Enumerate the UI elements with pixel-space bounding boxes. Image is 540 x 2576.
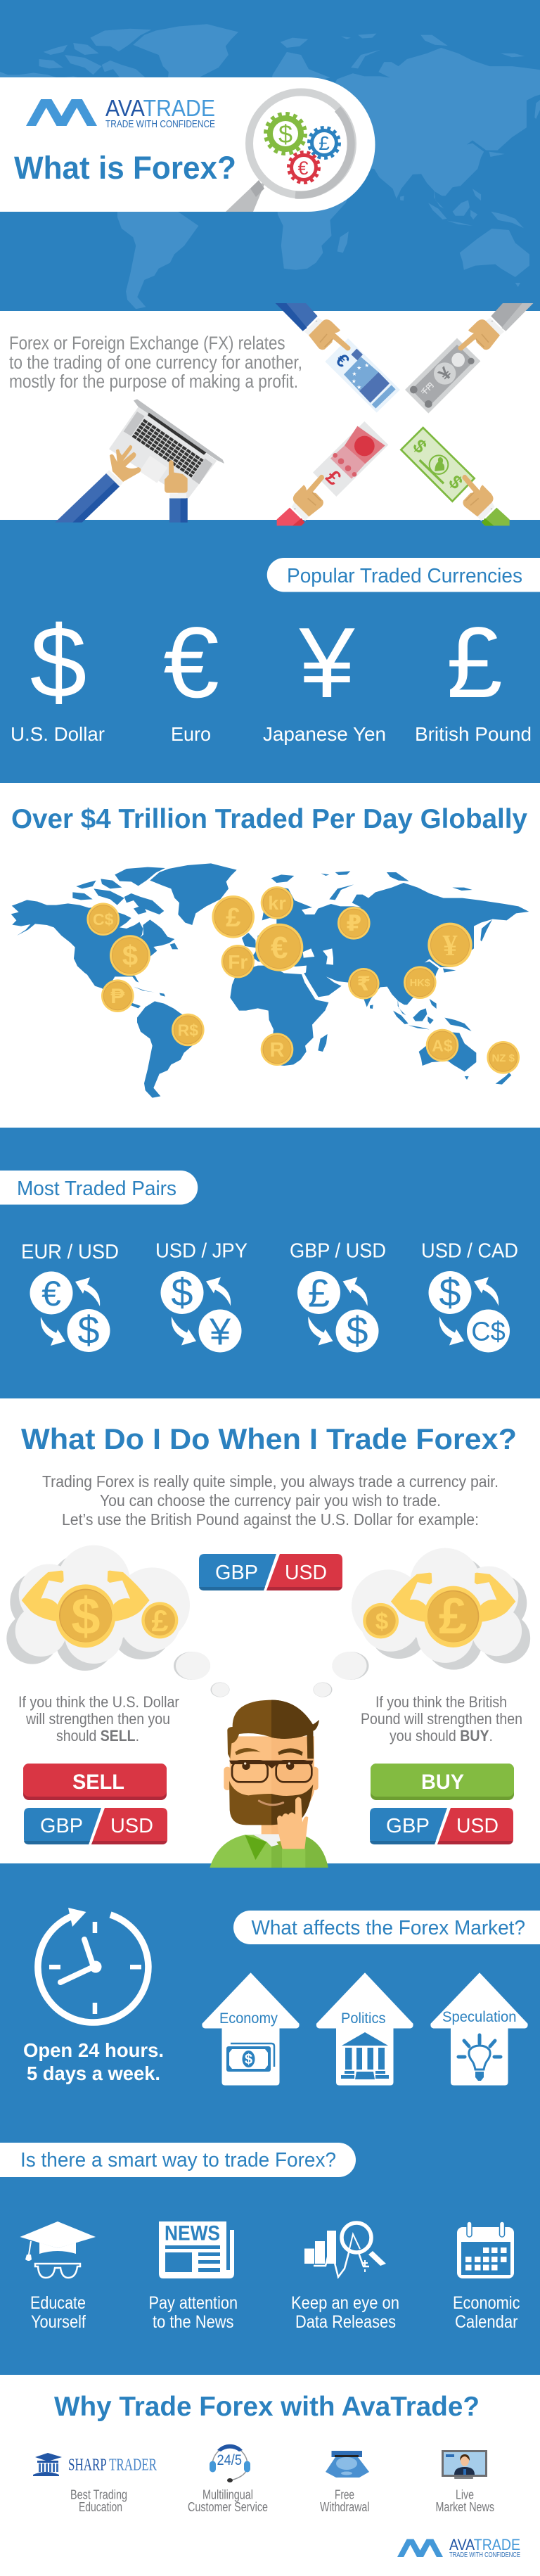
- thought cloud: dollar strengthens: [6, 1545, 190, 1671]
- coin: franc: Fr: [228, 951, 248, 973]
- panel: blue currencies band: [0, 520, 540, 783]
- currency: Euro: €: [163, 607, 219, 719]
- currency: British Pound: £: [446, 607, 503, 719]
- pill heading: What affects the Forex Market?: [233, 1911, 540, 1944]
- button: GBP / USD top: [199, 1554, 342, 1590]
- tip: Pay attention to the News: [149, 2221, 238, 2332]
- currency: U.S. Dollar: U.S. Dollar: [11, 723, 105, 745]
- pill heading: Most Traded Pairs: [0, 1171, 198, 1204]
- coin: euro: €: [271, 931, 288, 965]
- coin: euro: [255, 924, 303, 971]
- illustration: yen bill with hand: ¥: [435, 364, 456, 385]
- text: open hours: [23, 2039, 164, 2084]
- benefit: Free Withdrawal: Withdrawal: [320, 2500, 370, 2514]
- coin: franc: [221, 945, 255, 978]
- currency: British Pound: British Pound: [415, 723, 532, 745]
- illustration: pound bill with hand: [277, 421, 388, 550]
- icon: government building: [341, 2032, 389, 2079]
- thought cloud: pound strengthens: £: [439, 1588, 467, 1645]
- icon: TV news anchor: [442, 2450, 487, 2479]
- pair: GBP / USD: [290, 1239, 386, 1353]
- currency: U.S. Dollar: $: [30, 605, 86, 719]
- tip: Economic Calendar: [453, 2221, 520, 2332]
- logo: AvaTrade header: AVATRADE: [105, 95, 215, 121]
- coin: New Zealand dollar: NZ $: [491, 1052, 515, 1064]
- arrow: Politics: Politics: [341, 2010, 385, 2027]
- tip: Pay attention to the News: to the News: [153, 2312, 233, 2332]
- text: trading intro paragraph: Let’s use the British Pound against the U.S. Dollar for example:: [62, 1510, 479, 1529]
- pill heading: Is there a smart way to trade Forex?: [0, 2143, 356, 2177]
- button: GBP / USD left: [24, 1808, 167, 1844]
- button: GBP / USD right: USD: [456, 1815, 499, 1837]
- thought cloud: dollar strengthens: £: [152, 1605, 169, 1638]
- text: trading intro paragraph: [42, 1472, 499, 1529]
- tip: Economic Calendar: Economic: [453, 2293, 520, 2313]
- heading: What is Forex?: What is Forex?: [14, 150, 236, 186]
- logo: AvaTrade header: TRADE WITH CONFIDENCE: [105, 118, 215, 130]
- coin: real: R$: [178, 1021, 198, 1040]
- text: sell explanation: If you think the U.S. Dollar: [18, 1693, 179, 1711]
- pair: EUR / USD: [21, 1241, 119, 1352]
- arrow: Speculation: Speculation: [442, 2009, 516, 2025]
- thought cloud: pound strengthens: $: [375, 1608, 388, 1634]
- coin: Australian dollar: [426, 1029, 458, 1061]
- coin: Hong Kong dollar: [404, 966, 437, 999]
- illustration: dollar bill with hand: $: [444, 471, 467, 493]
- illustration: dollar bill with hand: $: [409, 435, 431, 457]
- panel: top blue header band: [0, 0, 540, 311]
- illustration: laptop with hands: [55, 399, 224, 523]
- icon: withdrawal slot: [326, 2451, 369, 2478]
- pill heading: What affects the Forex Market?: What affects the Forex Market?: [252, 1917, 525, 1939]
- illustration: euro bill with hand: ★: [356, 364, 361, 371]
- text: open hours: Open 24 hours.: [23, 2039, 164, 2061]
- thought cloud: dollar strengthens: $: [71, 1587, 101, 1645]
- coin: US dollar: [110, 935, 150, 976]
- coin: ruble: ₽: [347, 911, 361, 936]
- pair: USD / CAD: $: [439, 1270, 461, 1314]
- pair: USD / JPY: ¥: [209, 1311, 231, 1353]
- benefit: Best Trading Education: [33, 2453, 157, 2514]
- illustration: yen bill with hand: [405, 303, 533, 414]
- pair: GBP / USD: $: [346, 1308, 368, 1353]
- illustration: euro bill with hand: ★: [352, 378, 356, 385]
- text: sell explanation: [18, 1693, 179, 1745]
- arrow: Economy: Economy: [219, 2010, 278, 2027]
- text: sell explanation: should SELL.: [56, 1727, 139, 1745]
- pair: GBP / USD: GBP / USD: [290, 1239, 386, 1262]
- icon: Sharp Trader logo: [33, 2453, 157, 2476]
- icon: magnifier with gears: $: [278, 120, 292, 148]
- arrow: Speculation: [431, 1973, 527, 2085]
- button: SELL: [23, 1764, 167, 1800]
- tip: Economic Calendar: Calendar: [455, 2312, 518, 2332]
- tip: Educate Yourself: [20, 2221, 96, 2332]
- icon: newspaper: NEWS: [165, 2222, 220, 2245]
- pair: EUR / USD: EUR / USD: [21, 1241, 119, 1263]
- icon: magnifier with gears: [226, 92, 353, 212]
- illustration: euro bill with hand: ★: [352, 371, 357, 377]
- text: buy explanation: you should BUY.: [390, 1727, 493, 1745]
- benefit: Multilingual Customer Service: [188, 2444, 268, 2514]
- coin: krona: kr: [268, 893, 286, 914]
- coin: ruble: [338, 907, 371, 940]
- coin: peso: ₱: [110, 985, 125, 1008]
- button: GBP / USD right: GBP: [386, 1815, 430, 1837]
- pair: USD / JPY: USD / JPY: [155, 1239, 248, 1262]
- illustration: dollar bill with hand: [399, 426, 510, 526]
- coin: New Zealand dollar: [487, 1041, 520, 1074]
- pair: GBP / USD: £: [308, 1270, 330, 1315]
- pair: EUR / USD: €: [41, 1274, 61, 1313]
- button: BUY: BUY: [421, 1771, 464, 1794]
- pair: USD / CAD: USD / CAD: [421, 1239, 518, 1262]
- benefit: Live Market News: [436, 2450, 494, 2514]
- icon: newspaper: [159, 2221, 234, 2278]
- illustration: euro bill with hand: ★: [364, 362, 369, 369]
- tip: Educate Yourself: Yourself: [31, 2312, 86, 2332]
- thought bubbles: [174, 1652, 368, 1697]
- heading: Why Trade Forex with AvaTrade?: Why Trade Forex with AvaTrade?: [54, 2392, 480, 2422]
- icon: magnifier with gears: £: [319, 132, 330, 154]
- text: sell explanation: will strengthen then you: [25, 1710, 170, 1728]
- tip: Pay attention to the News: Pay attention: [149, 2293, 238, 2313]
- icon: calendar: [457, 2221, 514, 2278]
- tip: Keep an eye on Data Releases: Keep an eye on: [291, 2293, 399, 2313]
- benefit: Free Withdrawal: [320, 2451, 370, 2514]
- illustration: euro bill with hand: [276, 303, 400, 413]
- coin: yen: [428, 923, 472, 967]
- coin: rand: R: [270, 1039, 285, 1061]
- currency: Euro: Euro: [171, 723, 211, 745]
- icon: data chart and magnifier: [304, 2223, 386, 2277]
- currency: British Pound: [415, 607, 532, 745]
- pill heading: Most Traded Pairs: Most Traded Pairs: [17, 1178, 176, 1200]
- tip: Keep an eye on Data Releases: [291, 2223, 399, 2332]
- coin: yen: ¥: [443, 930, 457, 962]
- benefit: Multilingual Customer Service: Multilingual: [202, 2487, 253, 2501]
- benefit: Best Trading Education: Education: [79, 2500, 122, 2514]
- panel: blue traded pairs band: [0, 1128, 540, 1398]
- benefit: Live Market News: Market News: [436, 2500, 494, 2514]
- button: GBP / USD left: GBP: [40, 1815, 83, 1837]
- text: open hours: 5 days a week.: [27, 2062, 160, 2084]
- text: buy explanation: Pound will strengthen then: [361, 1710, 522, 1728]
- arrow: Economy: [202, 1973, 299, 2085]
- button: GBP / USD right: [370, 1808, 513, 1844]
- title pill with logo and magnifier: [0, 77, 375, 212]
- pair: USD / CAD: C$: [471, 1317, 506, 1346]
- coin: Australian dollar: A$: [432, 1037, 453, 1055]
- pair: USD / JPY: [155, 1239, 248, 1353]
- logo: AvaTrade footer: TRADE WITH CONFIDENCE: [449, 2551, 520, 2559]
- pill heading: Popular Traded Currencies: [267, 558, 540, 592]
- icon: magnifier with gears: €: [297, 158, 309, 179]
- pill heading: Popular Traded Currencies: Popular Traded Currencies: [287, 565, 522, 587]
- illustration: euro bill with hand: ★: [356, 384, 361, 390]
- coin: real: [172, 1014, 205, 1046]
- pair: USD / JPY: $: [171, 1270, 193, 1314]
- text: trading intro paragraph: Trading Forex is really quite simple, you always trade a currency pair.: [42, 1472, 499, 1491]
- text: forex definition: [9, 333, 302, 392]
- icon: money: [226, 2043, 274, 2072]
- benefit: Multilingual Customer Service: Customer Service: [188, 2500, 268, 2514]
- chart: world map with currency coins: [11, 863, 529, 1098]
- illustration: euro bill with hand: €: [331, 349, 354, 371]
- text: forex definition: mostly for the purpose of making a profit.: [9, 372, 298, 392]
- benefit: Best Trading Education: Best Trading: [70, 2487, 127, 2501]
- button: GBP / USD left: USD: [110, 1815, 153, 1837]
- benefit: Live Market News: Live: [456, 2487, 474, 2501]
- icon: Sharp Trader logo: SHARP TRADER: [68, 2456, 157, 2475]
- text: buy explanation: If you think the British: [375, 1693, 507, 1711]
- button: BUY: [371, 1764, 514, 1800]
- currency: Japanese Yen: ¥: [299, 607, 356, 719]
- logo: AvaTrade header: [26, 95, 215, 130]
- tip: Educate Yourself: Educate: [30, 2293, 86, 2313]
- button: GBP / USD top: USD: [285, 1562, 327, 1584]
- text: trading intro paragraph: You can choose the currency pair you wish to trade.: [100, 1491, 441, 1510]
- text: forex definition: Forex or Foreign Exchange (FX) relates: [9, 333, 285, 353]
- logo: AvaTrade footer: AVATRADE: [449, 2536, 520, 2553]
- coin: rand: [261, 1033, 293, 1066]
- background world map: [0, 24, 540, 309]
- icon: headset 24/5: 24/5: [217, 2452, 242, 2468]
- coin: pound: £: [226, 903, 240, 933]
- thought cloud: pound strengthens: [352, 1548, 530, 1670]
- currency: U.S. Dollar: [11, 605, 105, 745]
- panel: blue market and tips band: [0, 1863, 540, 2375]
- currency: Japanese Yen: [263, 607, 386, 745]
- pair: USD / CAD: [421, 1239, 518, 1352]
- heading: What Do I Do When I Trade Forex?: What Do I Do When I Trade Forex?: [21, 1422, 517, 1455]
- coin: rupee: ₹: [357, 973, 371, 995]
- icon: money: $: [245, 2052, 252, 2067]
- text: buy explanation: [361, 1693, 522, 1745]
- heading: Over $4 Trillion Traded Per Day Globally: Over $4 Trillion Traded Per Day Globally: [11, 804, 527, 834]
- pair: EUR / USD: $: [77, 1308, 100, 1352]
- coin: rupee: [348, 968, 380, 1000]
- button: SELL: SELL: [72, 1771, 124, 1794]
- coin: pound: [212, 895, 255, 938]
- text: forex definition: to the trading of one currency for another,: [9, 353, 302, 373]
- illustration: pound bill with hand: £: [321, 466, 346, 490]
- coin: peso: [101, 979, 134, 1012]
- illustration: thinking man: [210, 1700, 328, 1868]
- icon: graduation cap and glasses: [20, 2221, 96, 2278]
- button: GBP / USD top: GBP: [215, 1562, 258, 1584]
- coin: C$: C$: [93, 910, 114, 929]
- illustration: yen bill with hand: 千円: [418, 380, 435, 397]
- coin: US dollar: $: [122, 941, 138, 971]
- currency: Japanese Yen: Japanese Yen: [263, 723, 386, 745]
- coin: Hong Kong dollar: HK$: [410, 978, 430, 989]
- icon: clock: [38, 1908, 148, 2022]
- coin: C$: [86, 903, 120, 936]
- coin: krona: [261, 886, 293, 919]
- logo: AvaTrade footer: [397, 2536, 520, 2559]
- benefit: Free Withdrawal: Free: [335, 2487, 354, 2501]
- tip: Keep an eye on Data Releases: Data Releases: [295, 2312, 396, 2332]
- icon: light bulb: [458, 2035, 501, 2081]
- pill heading: Is there a smart way to trade Forex?: Is there a smart way to trade Forex?: [20, 2149, 336, 2172]
- arrow: Politics: [316, 1973, 413, 2085]
